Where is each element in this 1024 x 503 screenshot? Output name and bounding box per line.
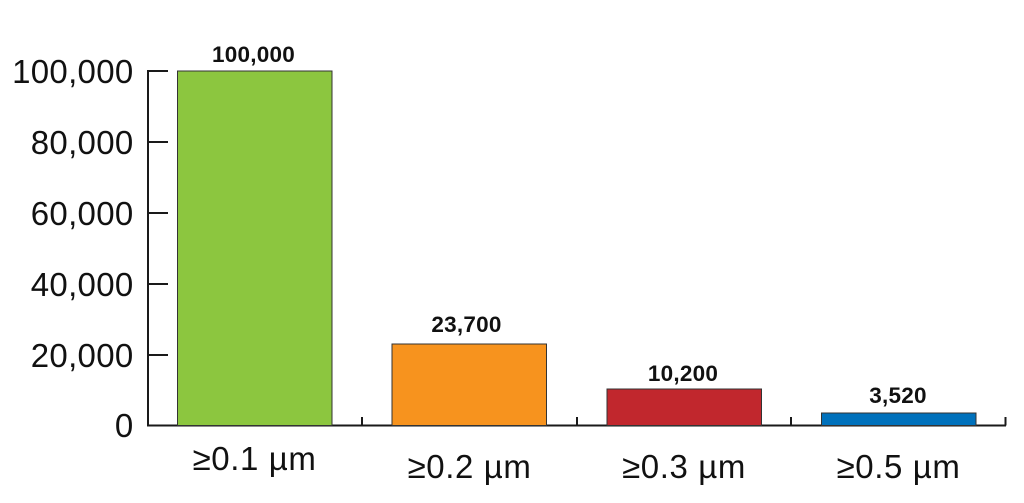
bar: 0.1 um: 100,000 — [212, 42, 295, 67]
y axis labels: 0 — [115, 407, 134, 444]
bar: 0.5 um: ≥0.5 µm — [837, 448, 960, 485]
y axis labels: 100,000 — [12, 53, 134, 90]
y axis — [147, 71, 1006, 426]
y axis labels: 40,000 — [31, 266, 134, 303]
y axis labels: 80,000 — [31, 124, 134, 161]
bar: 0.3 um: 10,200 — [648, 361, 718, 386]
bar: 0.5 um — [822, 383, 976, 485]
bar: 0.1 um — [178, 42, 332, 477]
bar: 0.3 um: ≥0.3 µm — [622, 448, 746, 485]
bar: 0.3 um — [607, 361, 762, 485]
y axis labels: 60,000 — [31, 195, 134, 232]
bar: 0.2 um — [392, 312, 546, 485]
y axis labels: 20,000 — [31, 337, 134, 374]
y axis labels — [12, 53, 134, 444]
bar: 0.5 um: 3,520 — [869, 383, 927, 408]
bar: 0.2 um: 23,700 — [431, 312, 502, 337]
bar: 0.2 um: ≥0.2 µm — [408, 448, 531, 485]
bar: 0.1 um: ≥0.1 µm — [193, 440, 316, 477]
